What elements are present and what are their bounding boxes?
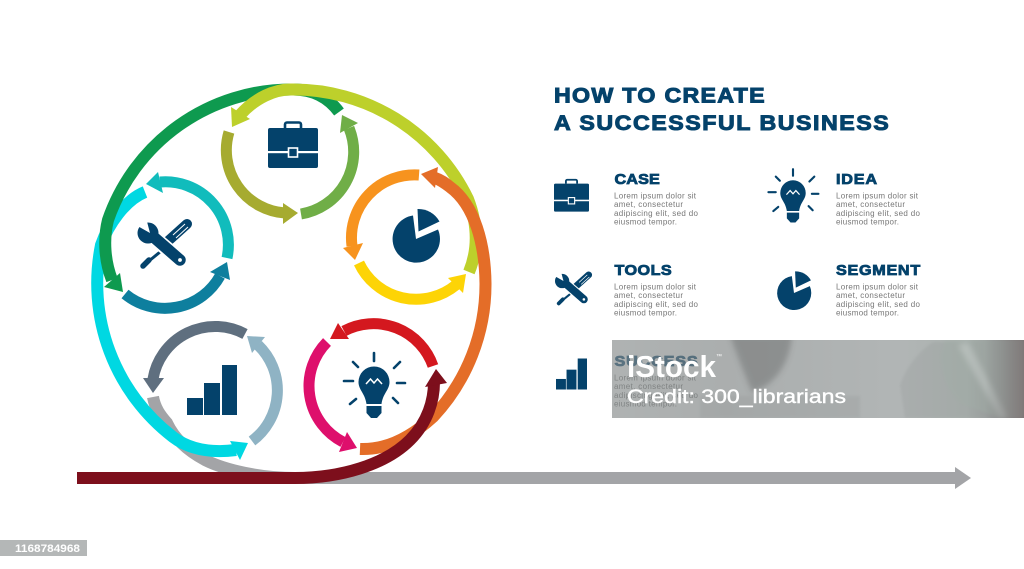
text block: success <box>614 354 699 409</box>
text block: idea: eiusmod tempor. <box>836 218 899 227</box>
watermark banner <box>612 335 1024 418</box>
text block: tools: amet, consectetur <box>614 291 683 300</box>
text block: idea: Lorem ipsum dolor sit <box>836 192 919 200</box>
icon: pie legend <box>777 271 811 310</box>
arrow: idea ring magenta segment <box>309 342 357 452</box>
text block: success: adipiscing elit, sed do <box>614 391 699 400</box>
text block: case: adipiscing elit, sed do <box>614 209 699 218</box>
arrow: large dark green sweep <box>104 89 339 292</box>
arrow: case ring light green segment <box>301 115 358 214</box>
icon: bar chart in ring <box>187 365 237 415</box>
arrow: large dark orange sweep <box>360 167 486 449</box>
text block: segment: amet, consectetur <box>836 291 905 300</box>
text block: case: Lorem ipsum dolor sit <box>614 192 697 200</box>
watermark banner: iStock <box>627 349 717 384</box>
title <box>554 83 889 135</box>
text block: segment: eiusmod tempor. <box>836 309 899 318</box>
arrow: case ring olive segment <box>226 132 298 224</box>
watermark banner: ™ <box>716 353 722 360</box>
arrow: segment ring orange segment <box>343 175 419 260</box>
text block: case: CASE <box>614 172 660 188</box>
title: HOW TO CREATE <box>554 83 765 107</box>
arrow: idea ring red segment <box>330 323 433 366</box>
icon: light bulb in ring <box>344 353 405 418</box>
text block: segment: adipiscing elit, sed do <box>836 300 921 309</box>
text block: success: SUCCESS <box>614 354 698 370</box>
text block: segment: SEGMENT <box>836 263 921 279</box>
text block: tools: TOOLS <box>614 263 672 279</box>
text block: tools: Lorem ipsum dolor sit <box>614 282 697 292</box>
text block: idea: amet, consectetur <box>836 200 905 209</box>
text block: case <box>614 172 699 227</box>
icon: briefcase in ring <box>268 122 318 168</box>
arrow: success ring slate segment <box>143 326 245 393</box>
text block: tools: adipiscing elit, sed do <box>614 300 699 309</box>
title: A SUCCESSFUL BUSINESS <box>554 111 889 135</box>
icon: pie chart in ring <box>393 209 440 263</box>
text block: case: amet, consectetur <box>614 200 683 209</box>
arrow: large cyan sweep <box>97 192 248 460</box>
icon: tools legend <box>553 267 589 303</box>
text block: case: eiusmod tempor. <box>614 218 677 227</box>
text block: segment <box>836 263 921 318</box>
text block: success: Lorem ipsum dolor sit <box>614 374 697 382</box>
arrow: grey timeline base <box>153 397 971 489</box>
text block: success: eiusmod tempor. <box>614 400 677 409</box>
icon: briefcase legend <box>554 180 589 212</box>
arrow: success ring light blue segment <box>247 336 277 441</box>
text block: idea: adipiscing elit, sed do <box>836 209 921 218</box>
text block: success: amet, consectetur <box>614 382 683 391</box>
arrow: segment ring yellow segment <box>359 263 466 299</box>
text block: idea: IDEA <box>836 172 877 188</box>
image id tag: 1168784968 <box>15 543 80 555</box>
text block: tools <box>614 263 699 318</box>
icon: bulb legend <box>768 169 818 223</box>
text block: idea <box>836 172 921 227</box>
text block: segment: Lorem ipsum dolor sit <box>836 282 919 292</box>
icon: bars legend <box>556 358 587 390</box>
arrow: maroon line into idea ring <box>77 369 447 478</box>
arrow: large lime sweep <box>231 89 476 272</box>
arrow: tools ring teal segment <box>146 172 228 258</box>
image id tag <box>0 540 87 556</box>
arrow: tools ring dark teal segment <box>125 262 230 308</box>
watermark banner: Credit: 300_librarians <box>627 387 846 408</box>
icon: tools in ring <box>134 212 188 266</box>
text block: tools: eiusmod tempor. <box>614 309 677 318</box>
